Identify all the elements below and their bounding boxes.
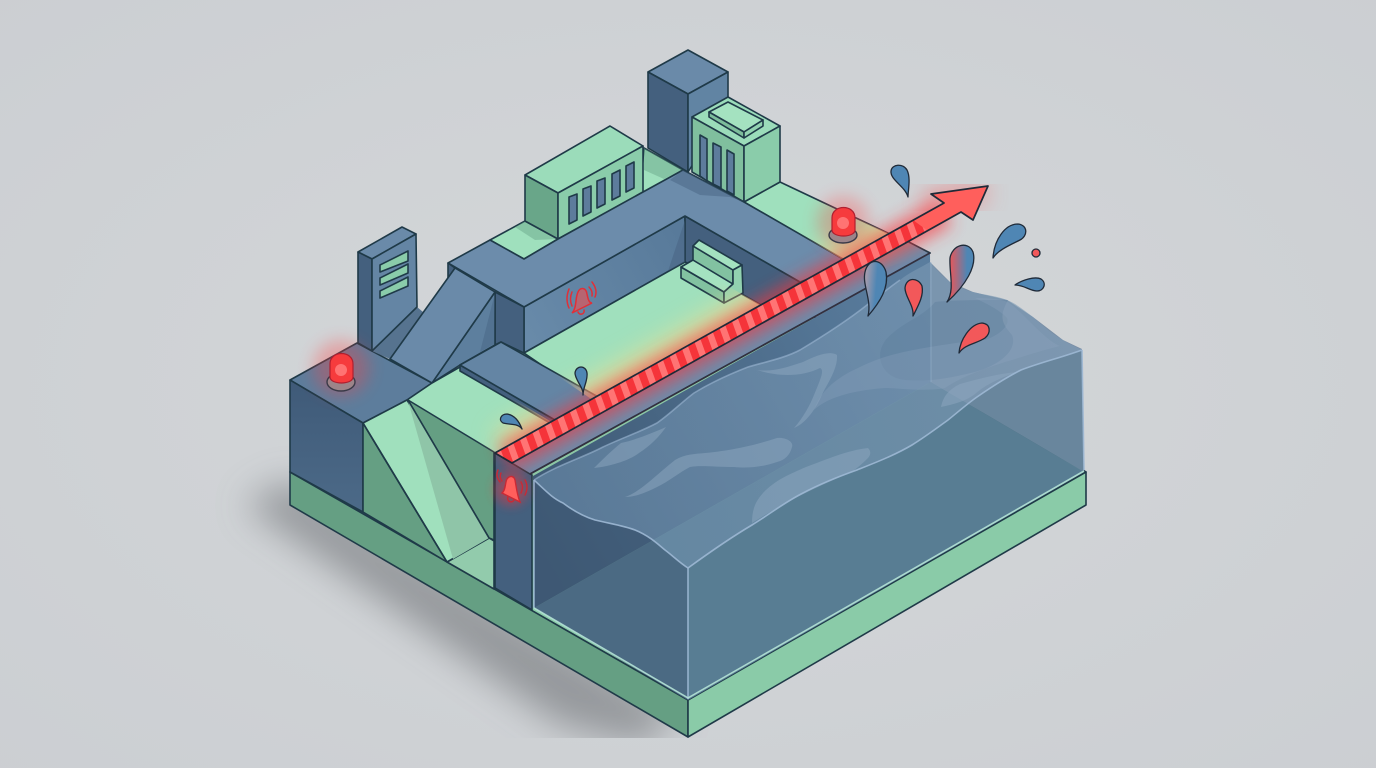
bell icon: wall end — [494, 470, 528, 506]
interior back wall — [533, 253, 931, 608]
wall end face — [495, 453, 532, 610]
droplet: red small — [905, 279, 922, 316]
arrow head glow — [925, 190, 985, 205]
alarm light: right — [817, 196, 869, 248]
left block front face — [290, 380, 363, 512]
droplet: red-blue large — [947, 245, 974, 302]
water surface — [534, 262, 1082, 568]
dark green right panel — [408, 400, 494, 540]
water edge lines — [534, 262, 1084, 699]
ramp shaded strip — [408, 401, 489, 559]
base top — [290, 245, 1086, 700]
tall dark tower — [648, 50, 728, 172]
inner wall of courtyard — [524, 216, 685, 353]
darker water blob — [880, 300, 1013, 381]
red dot — [1032, 249, 1040, 257]
wall top edge line — [530, 253, 930, 474]
ledge top — [407, 367, 555, 453]
walkway shadow under office — [670, 170, 744, 202]
ramp side face — [432, 292, 495, 383]
alarm light: left — [313, 340, 369, 396]
yellow glow on green floors — [500, 201, 940, 446]
interior right wall — [930, 262, 1084, 472]
blue slab — [460, 342, 600, 423]
walkway end dark face — [448, 263, 455, 280]
blue ramp — [390, 268, 495, 383]
green courtyard floor — [524, 262, 770, 405]
droplet: ledge — [500, 414, 522, 429]
upper blue walkway and ramp — [390, 170, 850, 405]
arrow fill — [495, 186, 988, 463]
green patch beside warehouse — [640, 148, 683, 195]
water tank — [530, 253, 1084, 700]
lower green ledge — [363, 342, 600, 589]
isometric flood barrier illustration — [242, 49, 1087, 738]
left block and server cabinet — [290, 227, 432, 512]
green ramp — [363, 400, 489, 562]
dark green side triangle — [363, 423, 447, 562]
red glow — [505, 212, 945, 458]
green patch shadows — [515, 148, 683, 240]
green warehouse with windows — [525, 126, 643, 239]
dark face under walkway — [495, 292, 524, 353]
arrow outline — [495, 186, 988, 463]
server cabinet — [358, 227, 417, 351]
lower green step — [447, 538, 494, 589]
cabinet shadow wedge — [372, 307, 423, 359]
water right face — [688, 350, 1084, 700]
back buildings — [490, 50, 930, 274]
droplet: top — [891, 165, 909, 197]
water left face — [534, 480, 688, 700]
water highlights — [594, 298, 1060, 523]
hazard stripes — [495, 220, 928, 463]
water droplets — [500, 165, 1044, 429]
droplet: red low — [959, 323, 989, 353]
base left face — [290, 472, 688, 737]
glow along the barrier — [500, 190, 985, 458]
left block top — [290, 343, 432, 423]
green stepped bench — [681, 240, 743, 303]
ground shadow — [245, 480, 680, 745]
ramp side shadow wedge — [480, 293, 495, 352]
wall top under band — [495, 240, 930, 474]
walkway top — [448, 170, 850, 307]
droplet: upper right large — [993, 224, 1026, 258]
green strip along top right — [744, 182, 930, 274]
green patch left of warehouse — [490, 221, 558, 259]
inner wall shadow wedge — [668, 220, 685, 271]
bell icon: upper wall — [567, 282, 596, 314]
green office with roof box — [692, 97, 780, 202]
base right face — [688, 472, 1086, 737]
droplet: blue over arrow — [864, 262, 887, 316]
droplet: right flat — [1015, 278, 1044, 291]
droplet: courtyard — [575, 367, 587, 395]
base slab — [290, 245, 1086, 737]
inner dark wall — [685, 216, 800, 306]
tank floor — [534, 382, 1084, 700]
red arrow with hazard stripes — [495, 186, 988, 463]
front barrier wall — [495, 240, 930, 610]
